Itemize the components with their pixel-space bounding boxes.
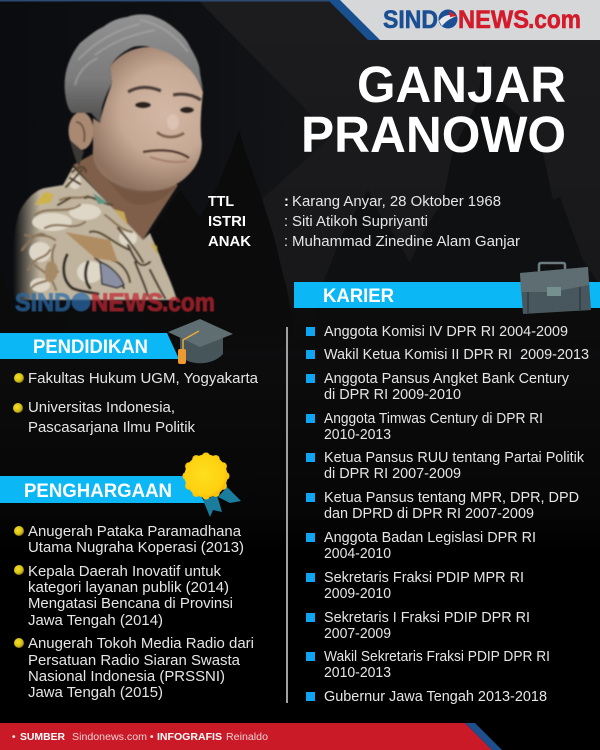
source credit: Sindonews.com	[72, 732, 147, 743]
personal details: Muhammad Zinedine Alam Ganjar	[292, 234, 520, 250]
career list: Gubernur Jawa Tengah 2013-2018	[324, 689, 547, 705]
awards list: Jawa Tengah (2015)	[28, 685, 163, 701]
career list: Ketua Pansus RUU tentang Partai Politik	[324, 450, 585, 466]
brows	[128, 87, 201, 100]
career list: Anggota Pansus Angket Bank Century	[324, 371, 570, 387]
career list: Sekretaris I Fraksi PDIP DPR RI	[324, 610, 530, 626]
face	[93, 47, 203, 193]
logo: SINDONEWS.com	[383, 4, 581, 34]
ear	[68, 112, 94, 150]
watermark logo: NEWS	[91, 289, 163, 317]
panel: penghargaan	[0, 452, 254, 701]
logo: SINDONEWS.com: NEWS	[458, 6, 529, 34]
career list: di DPR RI 2007-2009	[324, 466, 461, 482]
education list: Universitas Indonesia,	[28, 400, 175, 416]
shirt	[12, 167, 177, 300]
personal details: :	[284, 234, 288, 250]
watermark logo	[15, 287, 215, 317]
neck	[73, 150, 178, 240]
career list: 2007-2009	[324, 626, 391, 642]
logo: SINDONEWS.com: SIND	[383, 6, 438, 34]
icon: briefcase	[520, 263, 591, 314]
career list: Anggota Komisi IV DPR RI 2004-2009	[324, 324, 568, 340]
awards list: Kepala Daerah Inovatif untuk	[28, 564, 222, 580]
education list	[13, 371, 259, 436]
mouth	[143, 150, 189, 158]
awards list: Persatuan Radio Siaran Swasta	[28, 653, 241, 669]
karier heading bar: KARIER	[323, 285, 394, 307]
education list: Fakultas Hukum UGM, Yogyakarta	[28, 371, 259, 387]
personal details: ISTRI	[208, 214, 246, 230]
karier heading bar	[294, 282, 600, 308]
hair behind ear	[70, 140, 84, 166]
career list: Anggota Badan Legislasi DPR RI	[324, 530, 536, 546]
source credit: •	[150, 732, 154, 743]
career list	[306, 324, 589, 705]
career list: Sekretaris Fraksi PDIP MPR RI	[324, 570, 524, 586]
panel: pendidikan	[0, 319, 259, 436]
eyes	[135, 102, 151, 108]
career list: dan DPRD di DPR RI 2007-2009	[324, 506, 534, 522]
nose	[157, 132, 184, 137]
career list: 2009-2010	[324, 586, 391, 602]
personal details	[208, 194, 520, 250]
footer bar	[0, 723, 502, 750]
panel: karier	[286, 263, 600, 705]
source credit: •	[12, 732, 16, 743]
chin shadow	[100, 172, 176, 205]
logo header band	[0, 0, 600, 40]
career list: 2010-2013	[324, 665, 391, 681]
career list: di DPR RI 2009-2010	[324, 387, 461, 403]
personal details: Karang Anyar, 28 Oktober 1968	[292, 194, 501, 210]
awards list: Jawa Tengah (2014)	[28, 613, 163, 629]
personal details: :	[284, 214, 288, 230]
source credit: SUMBER	[20, 732, 66, 743]
career list: 2010-2013	[324, 427, 391, 443]
awards list: Anugerah Pataka Paramadhana	[28, 524, 242, 540]
watermark logo: SIND	[15, 289, 71, 317]
personal details: ANAK	[208, 234, 252, 250]
divider	[286, 327, 288, 703]
awards list: Anugerah Tokoh Media Radio dari	[28, 636, 254, 652]
watermark logo: .com	[162, 287, 215, 317]
icon: graduation cap	[168, 319, 233, 364]
portrait photo	[12, 14, 203, 300]
pendidikan heading bar: PENDIDIKAN	[33, 336, 148, 358]
title	[301, 56, 566, 163]
career list: 2004-2010	[324, 546, 391, 562]
light batik patches	[29, 175, 137, 292]
awards list: kategori layanan publik (2014)	[28, 580, 229, 596]
icon: medal	[182, 452, 241, 517]
source credit: Reinaldo	[226, 732, 268, 743]
source credit: INFOGRAFIS	[157, 732, 222, 743]
career list: Wakil Sekretaris Fraksi PDIP DPR RI	[324, 649, 550, 665]
awards list: Nasional Indonesia (PRSSNI)	[28, 669, 225, 685]
career list: Wakil Ketua Komisi II DPR RI 2009-2013	[324, 347, 589, 363]
title: PRANOWO	[301, 106, 566, 163]
penghargaan heading bar: PENGHARGAAN	[24, 480, 172, 502]
title: GANJAR	[357, 56, 566, 113]
hair highlights	[75, 20, 188, 85]
awards list: Mengatasi Bencana di Provinsi	[28, 596, 233, 612]
penghargaan heading bar	[0, 476, 205, 503]
education list: Pascasarjana Ilmu Politik	[28, 420, 196, 436]
logo: SINDONEWS.com: .com	[528, 4, 581, 34]
awards list: Utama Nugraha Koperasi (2013)	[28, 540, 244, 556]
awards list	[14, 524, 254, 701]
career list: Ketua Pansus tentang MPR, DPR, DPD	[324, 490, 579, 506]
hair	[65, 14, 203, 123]
career list: Anggota Timwas Century di DPR RI	[324, 411, 543, 427]
personal details: TTL	[208, 194, 234, 210]
batik pattern	[22, 167, 165, 298]
personal details: Siti Atikoh Supriyanti	[292, 214, 428, 230]
personal details: :	[284, 194, 289, 210]
source credit	[12, 732, 268, 743]
pendidikan heading bar	[0, 333, 179, 359]
